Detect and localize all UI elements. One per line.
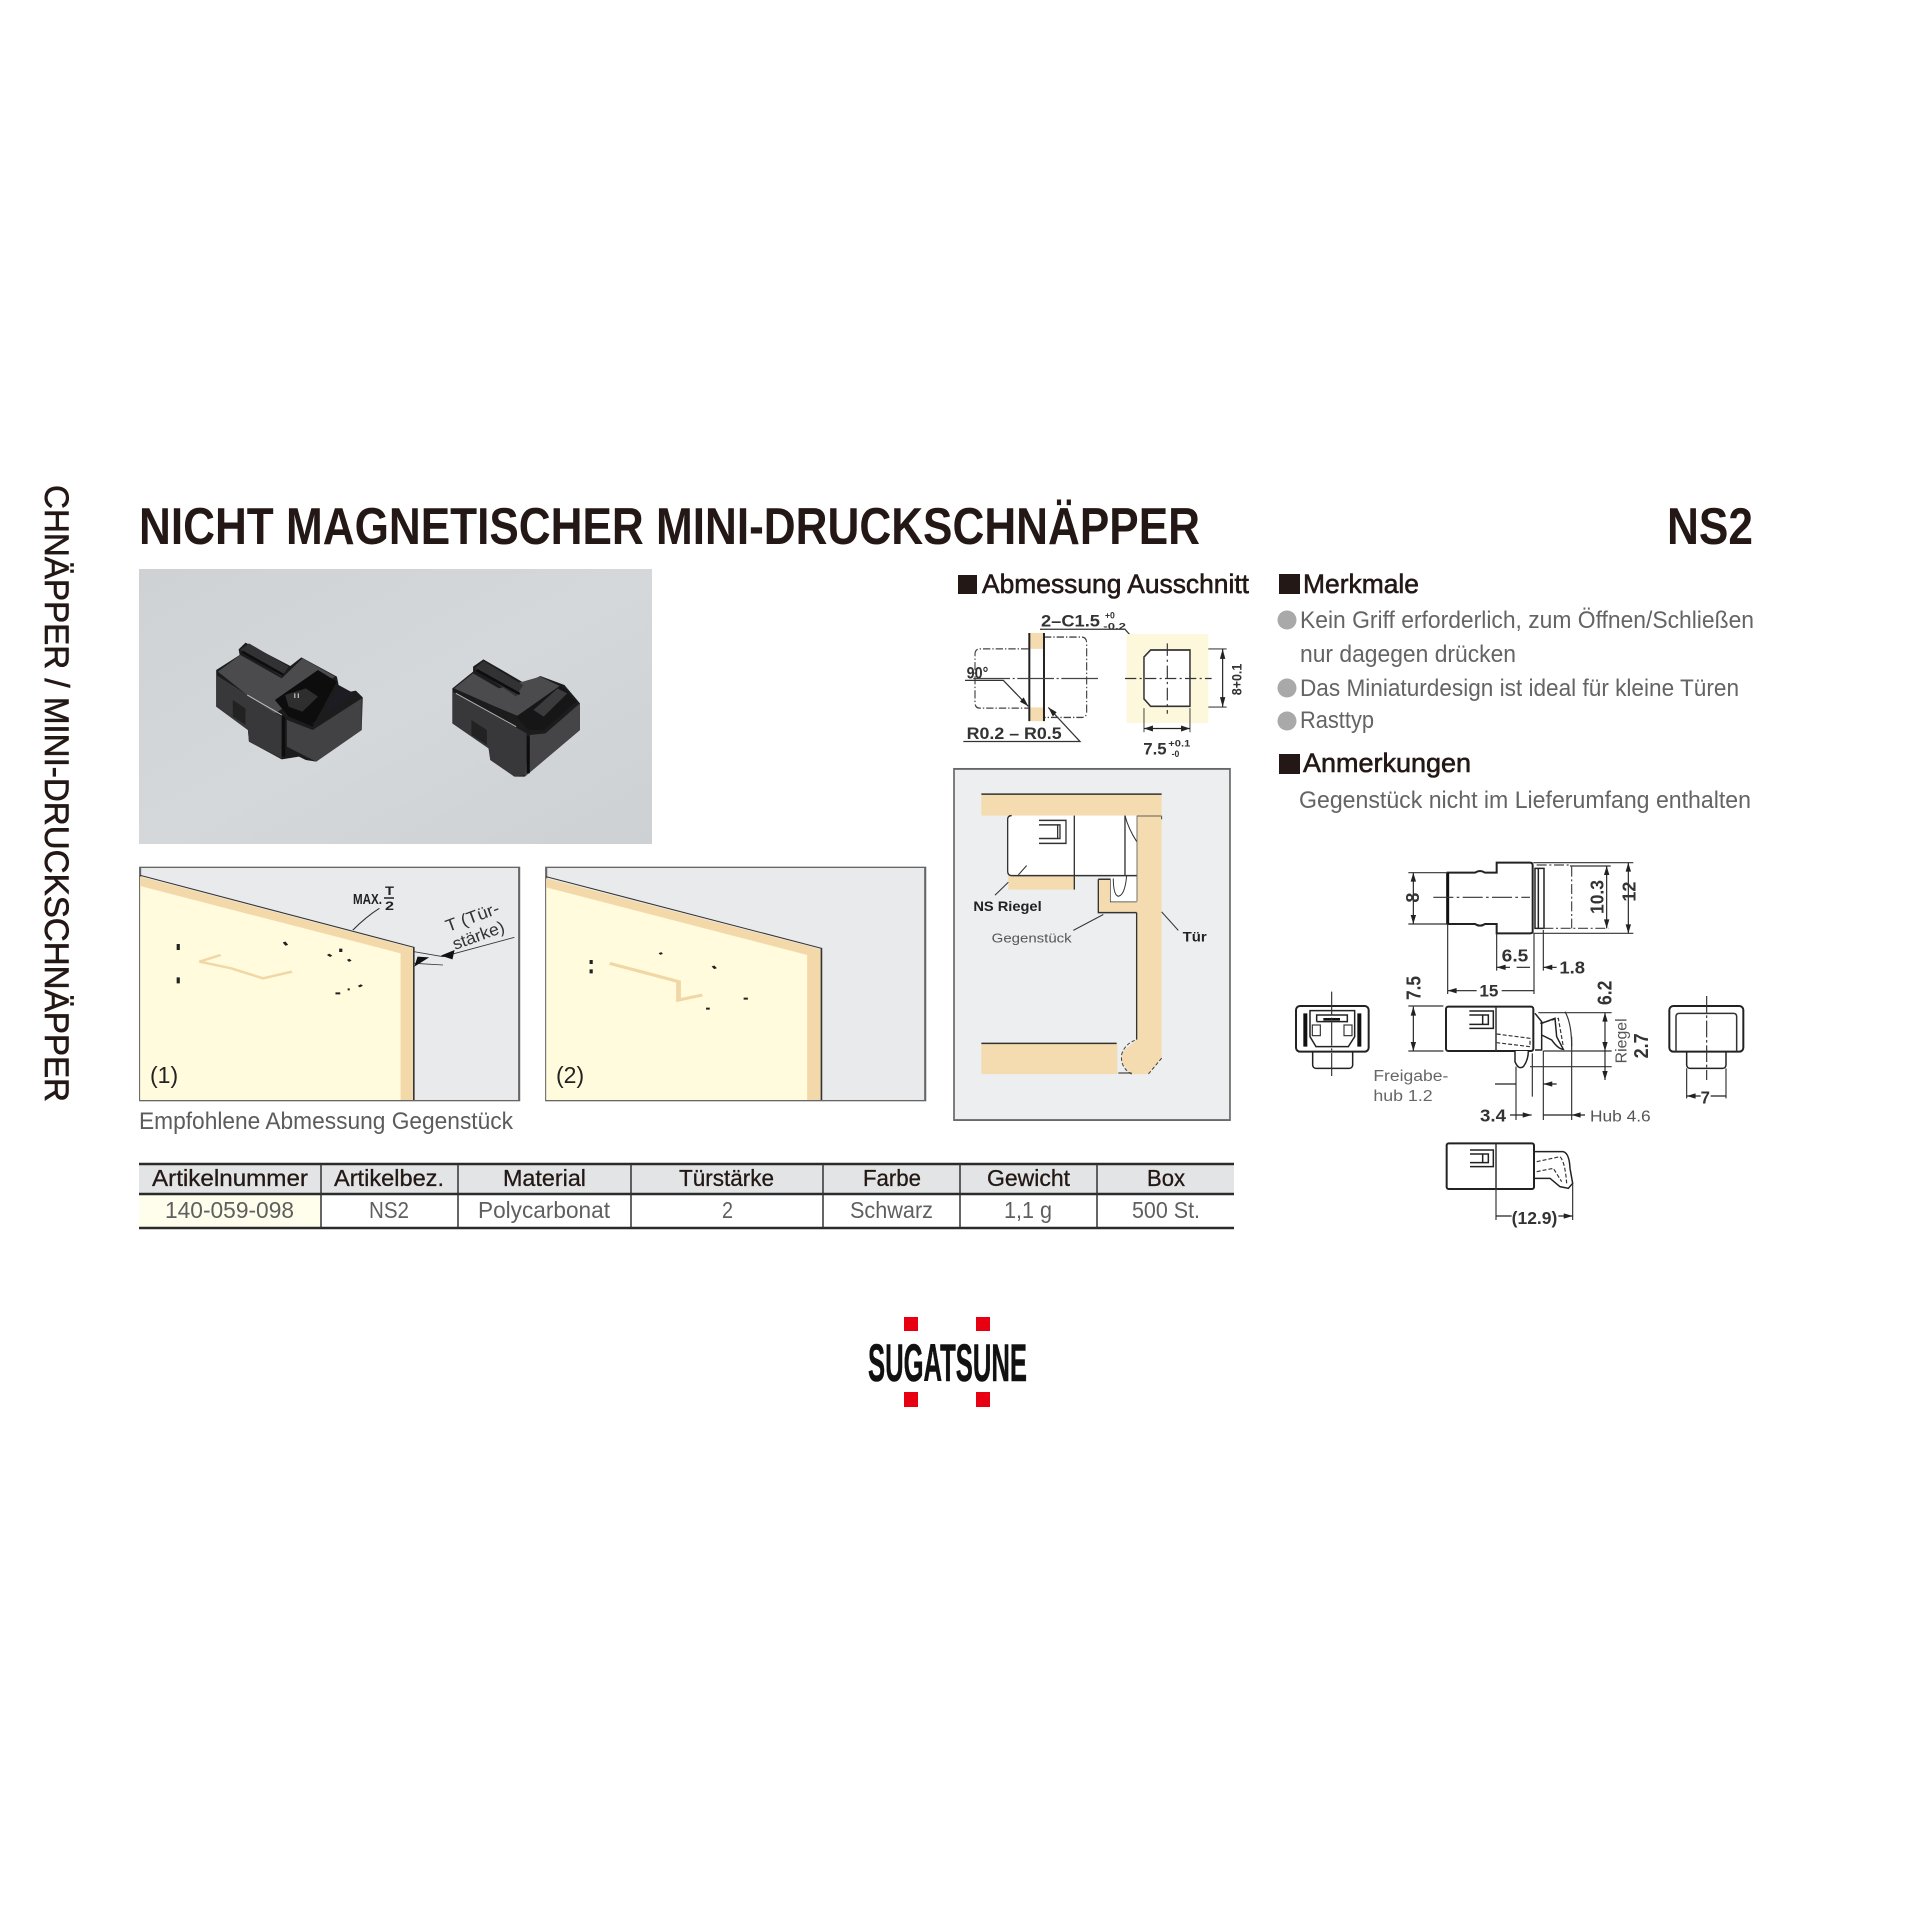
table data row: NS2	[369, 1197, 409, 1223]
side view: 3.4	[1480, 1106, 1506, 1126]
feature 2: Das Miniaturdesign ist ideal für kleine Türen	[1300, 675, 1739, 702]
side view: 7.5	[1403, 976, 1425, 1000]
feature 3: Rasttyp	[1300, 707, 1374, 734]
shelf boards and door	[981, 794, 1162, 1074]
specification table	[139, 1163, 1234, 1228]
cutout front view: -0	[1172, 749, 1179, 759]
top view: 8	[1402, 893, 1423, 903]
label: Tür: Tür	[1183, 929, 1207, 945]
table header row: Artikelbez.	[334, 1165, 444, 1191]
label: MAX T/2: T	[385, 884, 395, 898]
logo: Sugatsune	[868, 1317, 1027, 1407]
pressed view: (12.9)	[1512, 1208, 1557, 1228]
side view: Freigabe-	[1373, 1068, 1448, 1085]
table header row: Material	[503, 1165, 586, 1191]
cutout side section: +0	[1105, 610, 1115, 621]
label: NS Riegel: NS Riegel	[973, 899, 1042, 914]
label: MAX T/2: MAX.	[353, 891, 382, 908]
heading: Abmessung Ausschnitt: Abmessung Ausschnitt	[982, 569, 1249, 599]
top view: 12	[1618, 882, 1639, 902]
cutout front view	[1125, 634, 1245, 759]
cutout front view: 7.5	[1143, 740, 1167, 759]
top view: 6.5	[1502, 946, 1529, 966]
vertical side label: CHNÄPPER / MINI-DRUCKSCHNÄPPER	[37, 485, 75, 1102]
table data row	[165, 1197, 1200, 1223]
top view: 1.8	[1559, 957, 1585, 977]
side view	[1373, 976, 1653, 1126]
label: T (Türstärke)	[443, 899, 507, 954]
cutout side section: 90°	[967, 665, 988, 683]
catch body	[1008, 816, 1137, 902]
end view right	[1669, 996, 1743, 1107]
end view right: 7	[1701, 1087, 1710, 1107]
feature 1: Kein Griff erforderlich, zum Öffnen/Schließen	[1300, 607, 1754, 634]
feature 1	[1278, 607, 1754, 668]
top view: 15	[1479, 982, 1498, 1001]
table data row: 500 St.	[1132, 1197, 1200, 1223]
feature list	[1278, 607, 1754, 734]
table data row: 140-059-098	[165, 1197, 294, 1223]
label: T (Türstärke): T (Tür-	[443, 899, 502, 936]
technical dimension drawing	[1296, 863, 1743, 1228]
table data row: Polycarbonat	[478, 1197, 611, 1223]
caption: Empfohlene Abmessung Gegenstück	[139, 1108, 514, 1135]
heading: Merkmale: Merkmale	[1303, 569, 1419, 599]
label: Gegenstück: Gegenstück	[992, 931, 1072, 946]
cutout front view: 8+0.1	[1230, 664, 1245, 695]
feature 1: nur dagegen drücken	[1300, 641, 1516, 668]
side view: Riegel	[1614, 1018, 1631, 1063]
diagram panel (2)	[546, 867, 925, 1101]
label: MAX T/2: 2	[385, 899, 394, 913]
cutout front view: +0.1	[1168, 738, 1190, 748]
label: T (Türstärke): stärke)	[450, 917, 507, 954]
table header row: Box	[1147, 1165, 1185, 1191]
cutout side section: -0.2	[1103, 621, 1126, 631]
cutout side section: R0.2 – R0.5	[967, 725, 1062, 743]
top view: 10.3	[1587, 880, 1608, 914]
model code: NS2	[1667, 498, 1753, 556]
photo: left catch	[216, 643, 363, 762]
cutout dimension drawing	[963, 610, 1245, 759]
end view left	[1296, 992, 1369, 1076]
table data row: Schwarz	[850, 1197, 933, 1223]
text: SUGATSUNE	[868, 1334, 1027, 1393]
table header row: Gewicht	[987, 1165, 1071, 1191]
cutout side section	[963, 610, 1144, 743]
side view: Hub 4.6	[1590, 1109, 1651, 1126]
table header row	[152, 1165, 1185, 1191]
side view: 6.2	[1595, 981, 1617, 1005]
label: MAX T/2	[353, 884, 395, 913]
diagram panel (1)	[140, 867, 519, 1101]
pressed view	[1447, 1143, 1573, 1228]
title: NICHT MAGNETISCHER MINI-DRUCKSCHNÄPPER	[139, 498, 1200, 556]
side view: hub 1.2	[1373, 1088, 1433, 1105]
table header row: Türstärke	[679, 1165, 774, 1191]
heading: Anmerkungen: Anmerkungen	[1303, 748, 1471, 778]
table header row: Farbe	[863, 1165, 921, 1191]
table data row: 1,1 g	[1004, 1197, 1052, 1223]
label: (2): (2)	[556, 1062, 584, 1088]
product photo	[139, 569, 652, 844]
cutout side section: 2–C1.5	[1041, 613, 1100, 631]
installation section panel	[954, 769, 1230, 1120]
side view: 2.7	[1631, 1033, 1653, 1058]
callout lines	[995, 866, 1178, 930]
top view	[1402, 863, 1639, 1001]
photo: right catch	[452, 659, 580, 777]
table data row: 2	[722, 1197, 733, 1223]
label: (1): (1)	[150, 1062, 178, 1088]
note text: Gegenstück nicht im Lieferumfang enthalten	[1299, 787, 1751, 814]
table header row: Artikelnummer	[152, 1165, 308, 1191]
